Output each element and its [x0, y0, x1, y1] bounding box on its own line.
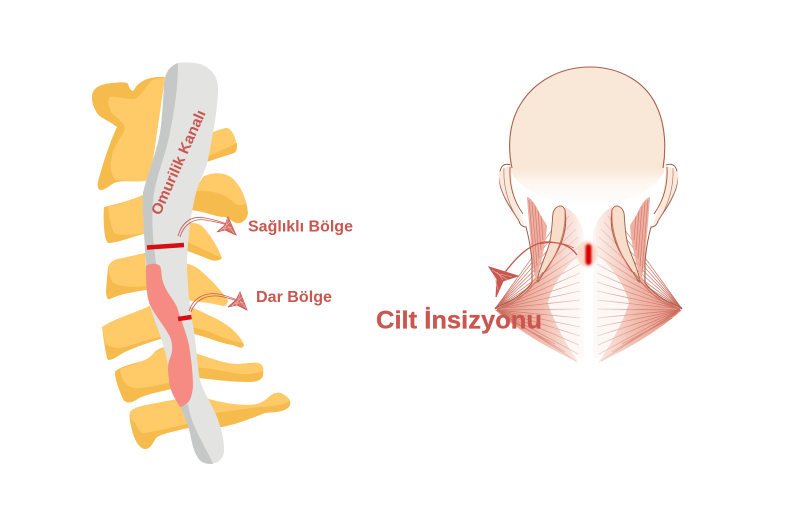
label: skin incision: Cilt İnsizyonu: [376, 306, 542, 334]
label: healthy zone: Sağlıklı Bölge: [248, 218, 353, 236]
spinous process 1: [200, 128, 237, 164]
arrow: healthy zone: [178, 217, 236, 237]
healthy zone marker: [147, 245, 184, 248]
spinous process 6: [192, 352, 263, 382]
spinous process 7: [205, 393, 290, 427]
vertebra 1: [92, 77, 165, 190]
incision halo: [577, 241, 597, 267]
neck centre line: [583, 215, 591, 363]
label: narrow zone: Dar Bölge: [256, 289, 332, 306]
panel: head and neck rear view: [495, 67, 682, 363]
spinous process 4: [185, 263, 228, 306]
vertebra 5: [115, 347, 175, 403]
head: [510, 67, 665, 205]
spinous process 5: [188, 306, 244, 348]
vertebra 6: [130, 398, 192, 449]
neck muscles left side: [495, 164, 584, 363]
narrow zone marker: [178, 317, 192, 319]
spinous process 3: [185, 223, 222, 261]
narrowed compression area: [146, 264, 193, 407]
label: spinal canal: Omurilik Kanalı: [148, 107, 210, 218]
spinous process 2: [190, 173, 248, 223]
spinal canal: [143, 62, 224, 464]
incision mark: [586, 244, 592, 265]
vertebra 2: [104, 193, 150, 243]
vertebra bones: [92, 77, 290, 449]
neck muscles right side: [593, 164, 682, 363]
arrow: incision: [489, 242, 577, 297]
vertebra 3: [106, 252, 152, 299]
arrow: narrow zone: [189, 292, 247, 312]
panel: cervical spine diagram: [92, 62, 290, 464]
vertebra 4: [102, 306, 172, 360]
